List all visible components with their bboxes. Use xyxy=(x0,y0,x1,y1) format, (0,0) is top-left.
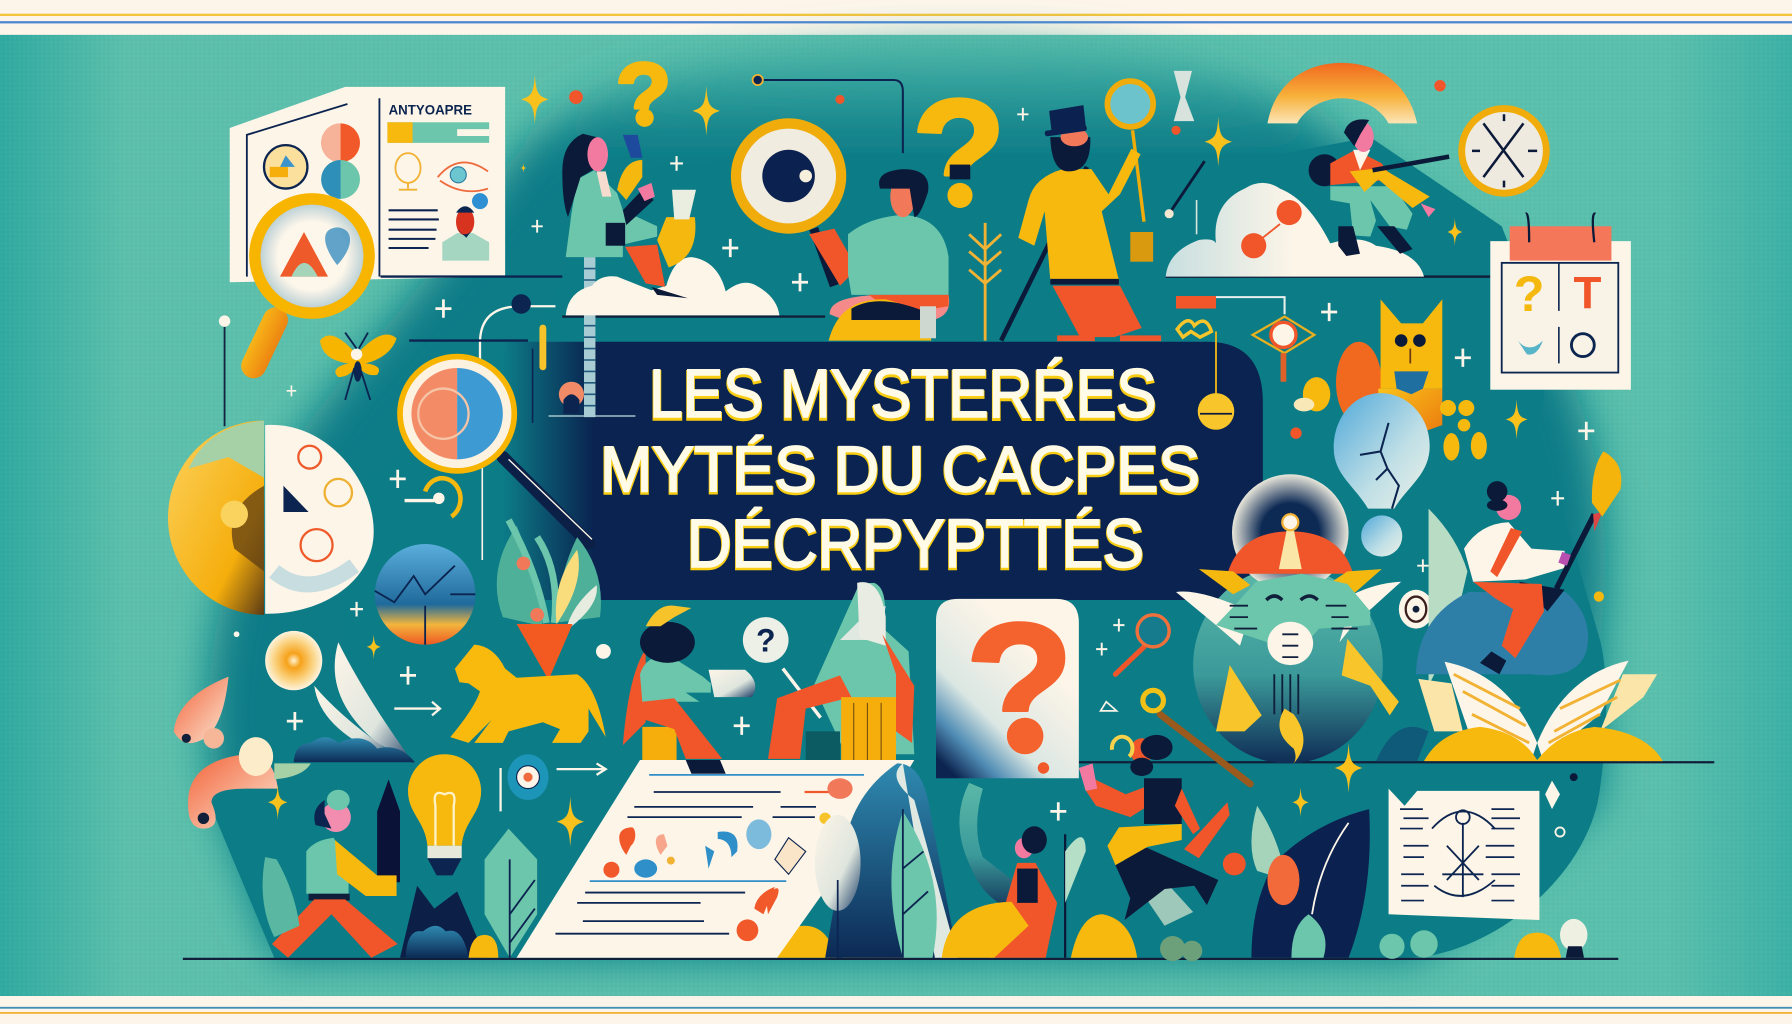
yellow cat xyxy=(1294,299,1487,461)
small ring icon xyxy=(405,478,460,517)
leaf tree xyxy=(485,829,537,958)
title text line 3: DÉCRPYPTTÉS xyxy=(687,505,1144,582)
document globe and eye icons xyxy=(395,153,488,209)
lantern cluster xyxy=(1176,296,1314,430)
question magnifier xyxy=(743,617,821,718)
paper colored marks xyxy=(603,778,853,941)
eye magnifier xyxy=(736,123,841,286)
rainbow xyxy=(1267,63,1417,123)
seated woman xyxy=(623,606,755,774)
question card: ? xyxy=(965,586,1074,785)
small bottom right mounds xyxy=(1379,919,1587,959)
title text line 2: MYTÉS DU CACPES xyxy=(600,432,1200,505)
keyhole icon xyxy=(549,382,635,416)
document bar xyxy=(387,122,489,143)
yellow question marks: ? xyxy=(616,45,671,147)
small accent dots xyxy=(234,80,1604,659)
yellow sparkles xyxy=(268,74,1528,847)
question mark dots xyxy=(635,109,973,208)
connector lines xyxy=(183,75,1714,959)
large magnifier with two-tone lens xyxy=(400,357,592,543)
small orange magnifier xyxy=(1115,615,1169,674)
right mountain and tree xyxy=(815,763,958,958)
document portrait xyxy=(442,206,489,261)
plant in pot xyxy=(497,520,601,680)
target icon xyxy=(1399,590,1433,629)
document top left xyxy=(230,87,505,282)
calendar glyphs: T xyxy=(1573,268,1601,319)
clock xyxy=(1462,109,1546,193)
scroll document xyxy=(1389,773,1578,920)
woman on cloud xyxy=(562,134,779,315)
small mountains xyxy=(400,886,486,958)
small bug xyxy=(1440,400,1487,461)
disc icons xyxy=(283,446,352,561)
calendar xyxy=(1490,214,1631,390)
white plus marks xyxy=(287,108,1594,821)
ladder xyxy=(584,257,595,417)
question magnifier: ? xyxy=(756,622,775,658)
cloud with person xyxy=(1166,119,1449,277)
cracked bulb xyxy=(1334,393,1430,509)
walking person xyxy=(272,779,400,958)
title panel xyxy=(503,342,1263,600)
explorer with magnifier xyxy=(1001,81,1161,341)
wheat sprig xyxy=(969,223,1001,341)
peach creature shapes xyxy=(174,677,311,829)
title text line 3: DÉCRPYPTTÉS xyxy=(687,507,1144,584)
wand xyxy=(1165,161,1205,234)
title text line 1: LES MYSTERŔES xyxy=(649,357,1157,434)
yellow horse xyxy=(450,645,606,743)
glowing orb xyxy=(265,631,322,690)
seated elder xyxy=(768,582,914,760)
yellow question marks xyxy=(618,61,999,176)
painter sitting on blue hill xyxy=(1416,451,1621,686)
title text line 2: MYTÉS DU CACPES xyxy=(600,434,1200,507)
yellow ground mounds xyxy=(469,923,909,958)
navy plant xyxy=(1251,806,1370,958)
triangle icon xyxy=(1101,702,1117,711)
man with phone xyxy=(1079,735,1246,926)
blue ball under bulb xyxy=(1361,515,1402,557)
goblin creature xyxy=(1176,474,1401,766)
central dark teal shape xyxy=(208,45,1606,958)
document circles xyxy=(264,123,360,199)
document text lines xyxy=(389,210,439,248)
large paper sheet xyxy=(517,760,914,958)
half disc with icons xyxy=(168,421,374,615)
globe xyxy=(375,544,475,645)
calendar glyphs: ? xyxy=(1514,265,1545,322)
title text line 1: LES MYSTERŔES xyxy=(649,355,1157,432)
yellow key xyxy=(1143,690,1250,784)
butterfly xyxy=(320,333,397,400)
seated person with magnifier xyxy=(809,169,949,341)
left shrub xyxy=(263,857,299,937)
yellow question marks: ? xyxy=(912,67,1006,240)
spiral icon and arrows xyxy=(394,702,606,811)
magnifier top left xyxy=(254,199,369,366)
curved horns and cloud xyxy=(294,642,415,763)
hourglass xyxy=(1174,71,1194,121)
light bulb xyxy=(408,754,481,875)
seated child and plants xyxy=(942,783,1202,961)
open book xyxy=(1376,661,1663,761)
calendar glyphs xyxy=(1514,265,1601,322)
document heading: ANTYOAPRE xyxy=(389,102,472,118)
